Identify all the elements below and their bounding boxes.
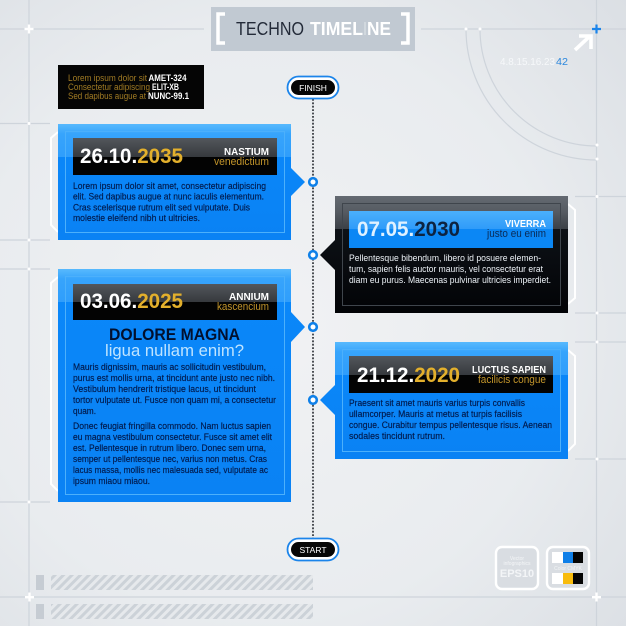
body text: tum, sapien felis auctor mauris, vel consectetur erat [349, 264, 543, 274]
heading: DOLORE MAGNA [109, 325, 240, 344]
title brackets [218, 14, 408, 43]
date header: VIVERRA [505, 218, 546, 230]
body text: ullamcorper. Mauris at metus at turpis facilisis [349, 409, 522, 419]
side brackets [51, 132, 575, 491]
body text: sodales tincidunt rutrum. [349, 431, 445, 441]
black legend box: Sed dapibus augue at [68, 91, 146, 101]
date header: facilicis congue [478, 374, 546, 386]
body text: Donec feugiat fringilla commodo. Nam luctus sapien [73, 421, 271, 431]
body text: Cras scelerisque rutrum elit sed vulputate. Duis [73, 202, 250, 212]
black legend box: Lorem ipsum dolor sit [68, 73, 148, 83]
top-right numbers: 42 [556, 56, 568, 68]
body text: quam. [73, 406, 96, 416]
badge: EPS10 [496, 547, 538, 589]
body text: est. Pellentesque in rutrum libero. Donec sem urna, [73, 443, 266, 453]
body text [349, 253, 551, 285]
date header: 07.05.2030 [357, 218, 460, 241]
black legend box: Consectetur adipiscing [68, 82, 150, 92]
body text: Pellentesque bibendum, libero id posuere elemen- [349, 253, 541, 263]
date header: justo eu enim [486, 228, 546, 240]
panel: 2030 [320, 196, 568, 313]
body text: Lorem ipsum dolor sit amet, consectetur adipiscing [73, 181, 266, 191]
body text [349, 398, 552, 441]
date header: 03.06.2025 [80, 290, 183, 313]
body text [73, 362, 276, 486]
title [211, 7, 415, 51]
panel: 2025 [58, 269, 305, 502]
badge: EPS10: infographics [504, 561, 531, 567]
hatched bars [36, 575, 313, 619]
title: TIMEL [310, 19, 363, 39]
black legend box [58, 65, 204, 109]
body text: molestie eleifend nibh ut ultricies. [73, 213, 200, 223]
body text: congue. Curabitur tempus pellentesque risus. Aenean [349, 420, 552, 430]
date header: 26.10.2035 [80, 145, 183, 168]
icon: white arrow [575, 36, 591, 50]
start pill [288, 538, 338, 560]
heading [105, 325, 244, 360]
black legend box: AMET-324 [148, 73, 187, 83]
finish pill [288, 76, 338, 98]
body text: semper ut pellentesque nec, varius non metus. Cras [73, 454, 267, 464]
badge: EPS10: Vector [510, 556, 524, 562]
body text: Praesent sit amet mauris varius turpis convallis [349, 398, 525, 408]
panel: 2035 [58, 124, 305, 240]
black legend box: NUNC-99.1 [148, 91, 189, 101]
date header [349, 211, 553, 248]
black legend box: ELIT-XB [152, 82, 179, 92]
body text: lacus massa, mollis nec malesuada sed, vulputate ac [73, 465, 268, 475]
finish pill: FINISH [299, 83, 327, 93]
date header [73, 138, 277, 175]
body text: purus est mollis urna, at tincidunt ante justo nec nibh. [73, 373, 275, 383]
date header: 21.12.2020 [357, 364, 460, 387]
badge: color swatches [547, 547, 589, 589]
start pill: START [299, 545, 327, 555]
date header: NASTIUM [224, 146, 269, 158]
badge: EPS10: EPS10 [500, 568, 534, 580]
timeline nodes [309, 178, 317, 404]
body text: Mauris dignissim, mauris ac sollicitudin vestibulum, [73, 362, 266, 372]
date header [73, 284, 277, 320]
date header: kascencium [217, 301, 269, 313]
date header [349, 356, 553, 393]
timeline dotted axis [312, 99, 314, 538]
title: TECHNO [236, 19, 304, 39]
body text: diam eu purus. Maecenas pulvinar ultricies imperdiet. [349, 275, 551, 285]
title: I [363, 19, 367, 39]
title: NE [367, 19, 391, 39]
date header: LUCTUS SAPIEN [472, 364, 546, 376]
body text [73, 181, 266, 223]
badge: color swatches: Color CMYK [554, 566, 583, 572]
body text: eu magna vestibulum consectetur. Fusce sit amet elit [73, 432, 272, 442]
top-right numbers: 4.8.15.16.23 [500, 56, 555, 68]
date header: ANNIUM [229, 291, 269, 303]
panel: 2020 [320, 342, 568, 459]
body text: elit. Sed dapibus augue at nunc iaculis elementum. [73, 192, 264, 202]
icon: blue plus [592, 24, 601, 34]
body text: Vestibulum hendrerit tristique lacus, ut tincidunt [73, 384, 256, 394]
body text: tortor vulputate ut. Fusce non quam mi, a consectetur [73, 395, 276, 405]
heading: ligua nullam enim? [105, 341, 244, 360]
body text: ipsum miaou miaou. [73, 476, 150, 486]
date header: venedictium [214, 156, 269, 168]
